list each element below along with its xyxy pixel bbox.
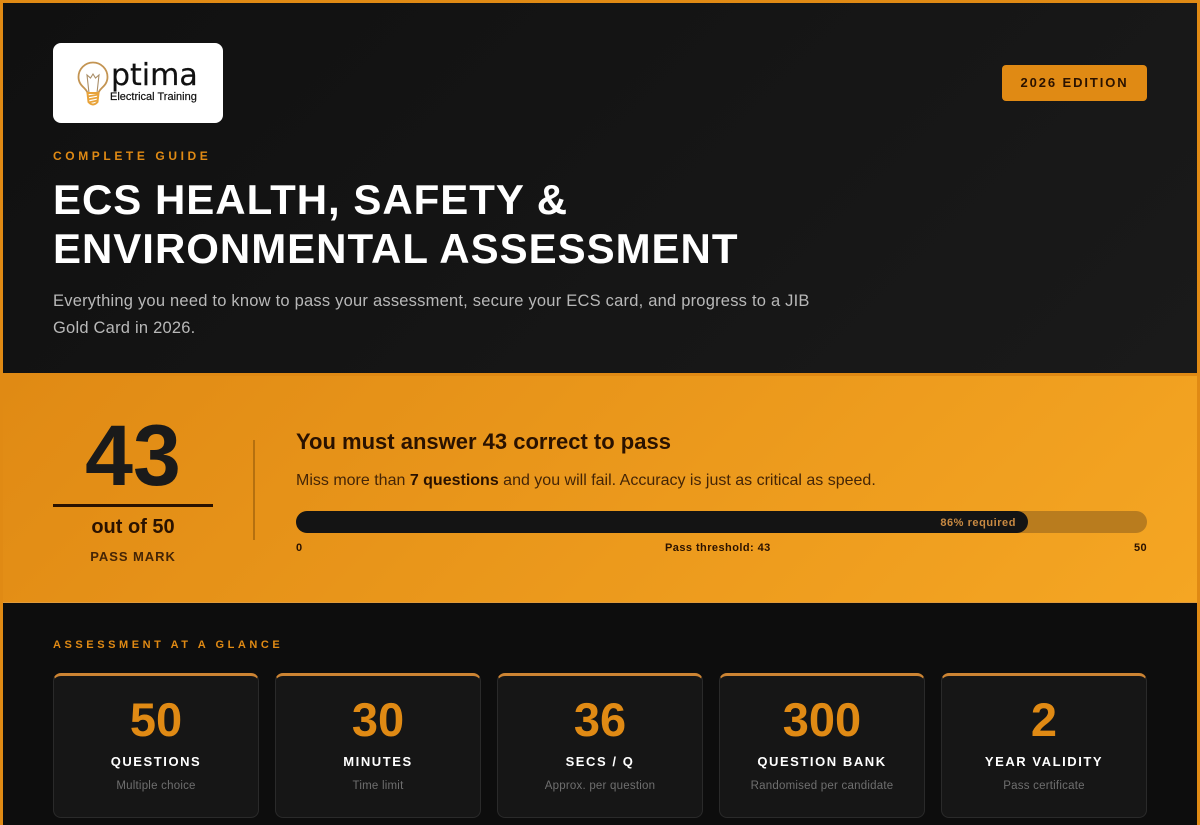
stat card: year validity: Pass certificate [1003,780,1085,792]
stat card: minutes: Time limit [353,780,403,792]
main title: ECS HEALTH, SAFETY & [53,176,568,223]
out of 50: out of 50 [91,516,175,538]
section heading: ASSESSMENT AT A GLANCE [53,639,283,651]
subtitle: Gold Card in 2026. [53,319,195,337]
stat card: seconds per question: Approx. per question [545,780,655,792]
stat card: questions: 50 [130,693,182,746]
stat card: questions [53,673,259,818]
pass mark number: 43 [85,408,181,504]
main title: ENVIRONMENTAL ASSESSMENT [53,225,738,272]
subtitle [53,292,810,337]
stat card: minutes [275,673,481,818]
eyebrow label: COMPLETE GUIDE [53,149,211,163]
pass mark band [0,373,1200,603]
icon: light bulb [78,62,108,106]
stat card: seconds per question [497,673,703,818]
pass mark rule [53,504,213,507]
progress bar [296,511,1147,533]
scale threshold: Pass threshold: 43 [665,542,771,554]
assessment at a glance section [0,603,1200,825]
scale start: 0 [296,542,303,554]
pass mark explanation: Miss more than 7 questions and you will fail. Accuracy is just as critical as speed. [296,472,876,489]
stat card: question bank [719,673,925,818]
pass mark heading: You must answer 43 correct to pass [296,429,671,454]
pass mark label: PASS MARK [90,549,176,564]
vertical divider [253,440,255,540]
logo tagline: Electrical Training [110,91,197,103]
edition badge: 2026 EDITION [1020,75,1129,90]
stat card: questions: Multiple choice [116,780,196,792]
logo card [53,43,223,123]
logo wordmark: ptima [111,58,198,93]
stat card: year validity: YEAR VALIDITY [985,754,1103,769]
main title [53,176,738,272]
stat card: questions: QUESTIONS [111,754,201,769]
stat card: seconds per question: 36 [574,693,626,746]
stat card: minutes: MINUTES [343,754,413,769]
header panel [0,0,1200,373]
stat card: seconds per question: SECS / Q [566,754,634,769]
stat card: question bank: Randomised per candidate [751,780,893,792]
pass mark block [53,408,213,564]
scale end: 50 [1134,542,1147,554]
progress bar fill: 86% required [940,517,1016,529]
subtitle: Everything you need to know to pass your assessment, secure your ECS card, and progress to a JIB [53,292,810,310]
stat card: year validity [941,673,1147,818]
edition badge [1002,65,1147,101]
stat card: year validity: 2 [1031,693,1057,746]
stat card: question bank: QUESTION BANK [757,754,887,769]
stat card: question bank: 300 [783,693,861,746]
stat card: minutes: 30 [352,693,404,746]
progress bar fill [296,511,1028,533]
